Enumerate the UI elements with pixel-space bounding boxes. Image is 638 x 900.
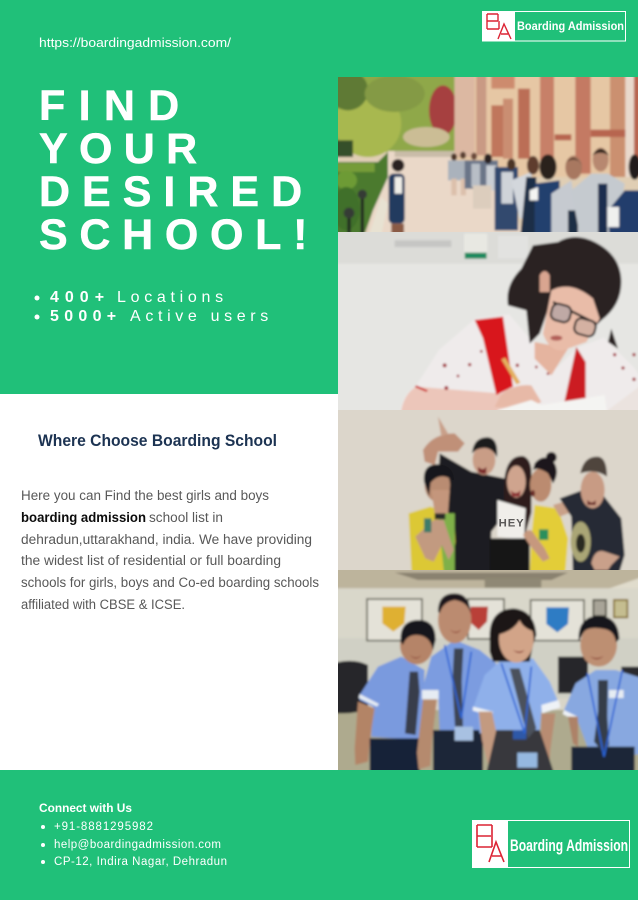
photo: school children in uniform bbox=[338, 570, 638, 770]
body paragraph: school list in bbox=[149, 510, 223, 525]
wall bbox=[328, 588, 638, 672]
hedges bbox=[338, 151, 390, 232]
boy tall bbox=[422, 640, 496, 733]
body paragraph: the widest list of residential or full boarding bbox=[21, 553, 281, 568]
top logo bbox=[482, 11, 626, 41]
white copy section bbox=[21, 431, 319, 612]
contact list: +91-8881295982 bbox=[54, 821, 153, 833]
stats list: Locations bbox=[117, 289, 228, 306]
left boy yellow bbox=[409, 507, 455, 580]
body paragraph: dehradun,uttarakhand, india. We have providing bbox=[21, 532, 312, 547]
boy left bbox=[360, 657, 425, 740]
body paragraph: boarding admission bbox=[21, 510, 146, 525]
raised arm bbox=[423, 433, 465, 465]
main title: YOUR bbox=[39, 125, 208, 173]
ground bbox=[367, 149, 522, 232]
man right bbox=[560, 490, 625, 577]
shirt print bbox=[443, 350, 636, 390]
boy right bbox=[564, 670, 638, 757]
stats list: 5000+ bbox=[50, 308, 121, 325]
body paragraph: schools for girls, boys and Co-ed boarding schools bbox=[21, 575, 319, 590]
trees bbox=[338, 77, 456, 153]
paper bbox=[497, 396, 605, 410]
body paragraph bbox=[21, 488, 319, 612]
body paragraph: affiliated with CBSE & ICSE. bbox=[21, 597, 185, 612]
main title: SCHOOL! bbox=[39, 211, 319, 259]
face bbox=[543, 287, 600, 350]
body paragraph: Here you can Find the best girls and boys bbox=[21, 488, 269, 503]
top green panel bbox=[0, 0, 338, 394]
contact list: help@boardingadmission.com bbox=[54, 839, 221, 851]
boy in black bbox=[438, 453, 505, 580]
contact list: CP-12, Indira Nagar, Dehradun bbox=[54, 856, 227, 868]
building bbox=[455, 77, 610, 178]
sofa and floor bbox=[338, 709, 638, 770]
section heading: Where Choose Boarding School bbox=[38, 431, 277, 450]
neck bbox=[535, 342, 568, 375]
website url: https://boardingadmission.com/ bbox=[39, 35, 231, 50]
girl bbox=[473, 658, 560, 733]
shirt and arm bbox=[420, 316, 638, 407]
photo: girl writing bbox=[338, 232, 638, 410]
stats list: Active users bbox=[130, 308, 273, 325]
woman bbox=[503, 456, 532, 536]
hair bbox=[507, 237, 621, 344]
contact list bbox=[41, 821, 227, 868]
HEY shirt text: HEY bbox=[499, 518, 524, 530]
main title: FIND bbox=[39, 82, 193, 130]
photo: group of friends bbox=[338, 410, 638, 570]
stats list: 400+ bbox=[50, 289, 110, 306]
footer green panel bbox=[0, 770, 638, 900]
woman yellow bbox=[530, 505, 568, 580]
connect heading: Connect with Us bbox=[39, 801, 132, 815]
main title: DESIRED bbox=[39, 168, 314, 216]
footer logo bbox=[472, 820, 630, 868]
stats list bbox=[34, 289, 273, 325]
main title bbox=[39, 82, 319, 259]
ceiling bbox=[338, 570, 638, 589]
frames bbox=[367, 599, 422, 641]
connect section bbox=[39, 801, 227, 868]
photo: students lined up at school bbox=[338, 77, 638, 232]
students in line bbox=[389, 174, 405, 224]
top logo: Boarding Admission bbox=[517, 19, 624, 33]
